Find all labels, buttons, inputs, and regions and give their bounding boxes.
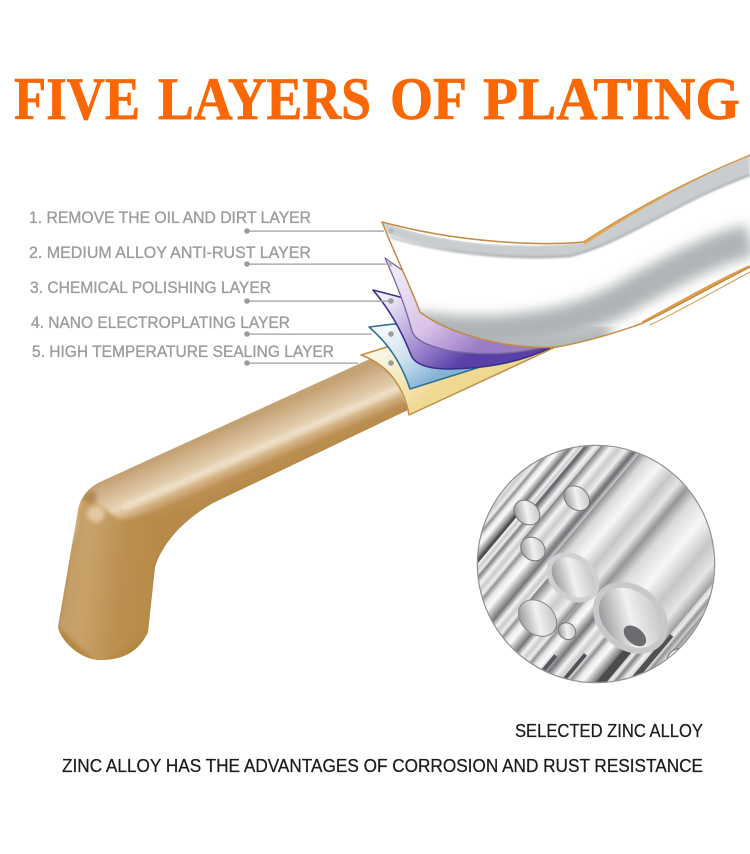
layer labels: 5. HIGH TEMPERATURE SEALING LAYER xyxy=(32,343,334,361)
layer 5: high temperature sealing xyxy=(361,345,560,415)
layer labels: 2. MEDIUM ALLOY ANTI-RUST LAYER xyxy=(29,244,311,262)
layer 3: chemical polishing xyxy=(373,290,550,369)
layer labels: 1. REMOVE THE OIL AND DIRT LAYER xyxy=(29,209,311,227)
zinc alloy tubes photo xyxy=(476,444,716,684)
layer labels xyxy=(29,209,334,361)
tube ends xyxy=(514,500,540,526)
title: PLATING xyxy=(483,66,740,132)
label leaders xyxy=(244,228,394,366)
caption: zinc alloy advantages: ZINC ALLOY HAS THE ADVANTAGES OF CORROSION AND RUST RESISTANCE xyxy=(62,756,703,776)
layer 4: nano electroplating xyxy=(369,324,550,389)
layer 1: silver plated handle xyxy=(382,153,750,349)
gold handle arm and foot xyxy=(58,352,408,665)
caption: selected zinc alloy: SELECTED ZINC ALLOY xyxy=(515,721,703,741)
title xyxy=(14,66,740,132)
title: LAYERS xyxy=(158,66,371,132)
title: OF xyxy=(390,66,467,132)
title: FIVE xyxy=(14,66,140,132)
layer 2: medium alloy anti-rust xyxy=(385,258,540,354)
mid tubes xyxy=(540,446,634,540)
layer labels: 3. CHEMICAL POLISHING LAYER xyxy=(30,279,271,297)
layer labels: 4. NANO ELECTROPLATING LAYER xyxy=(31,314,290,332)
